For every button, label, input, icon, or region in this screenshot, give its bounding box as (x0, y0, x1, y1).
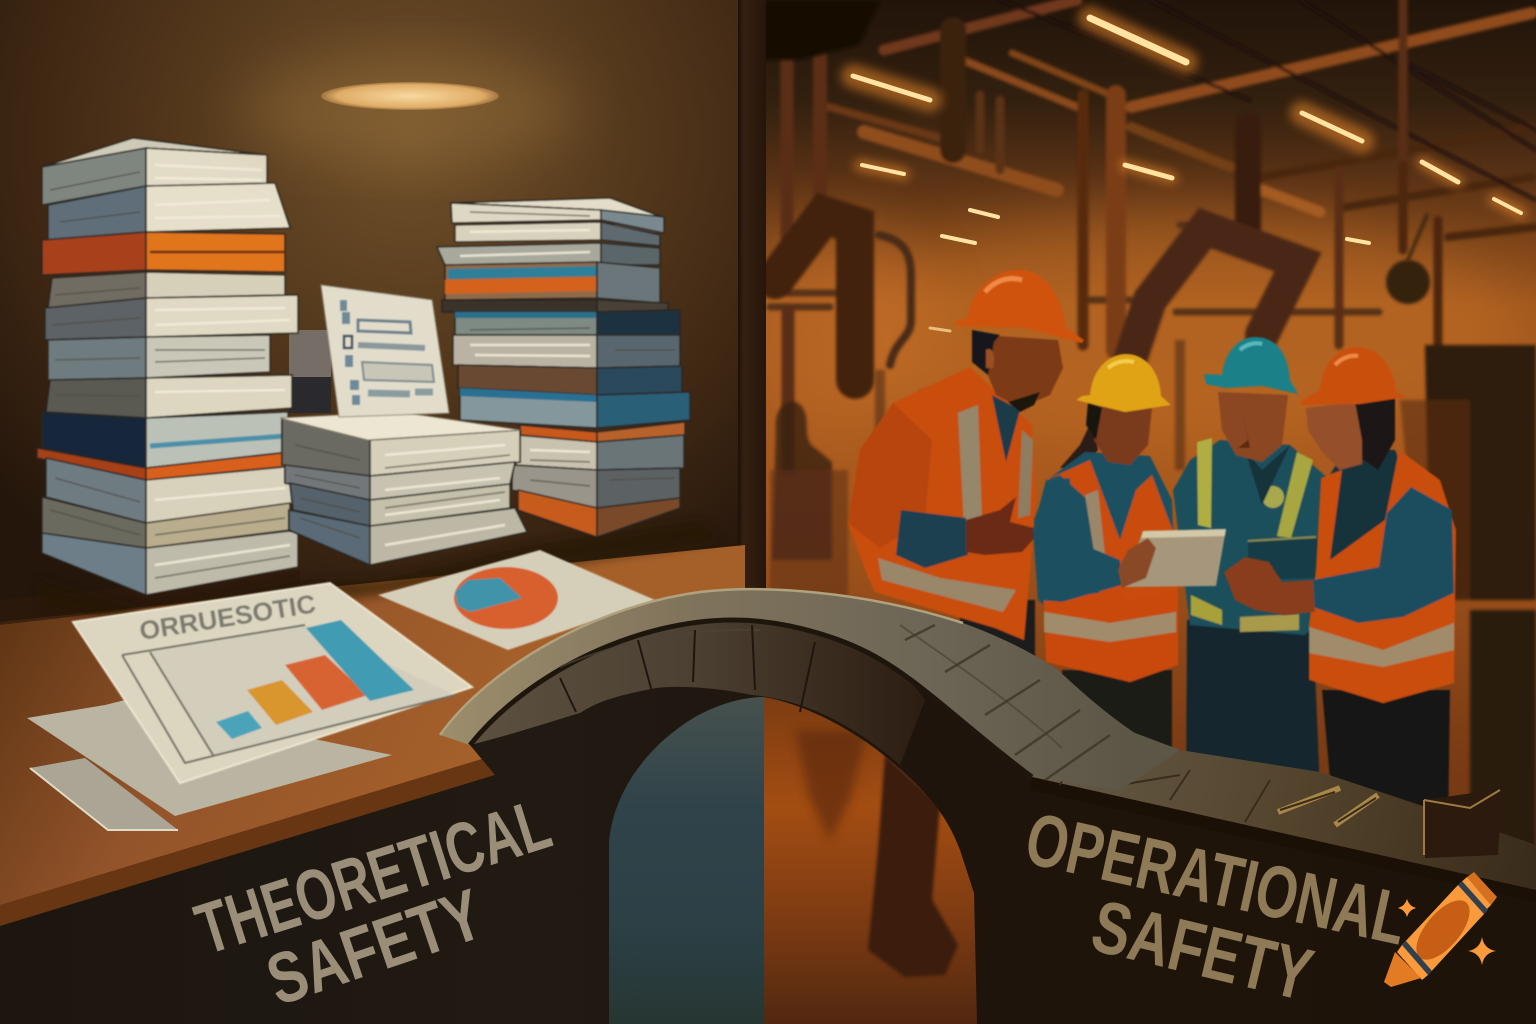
panel: factory background (766, 0, 1536, 890)
machinery pipes (775, 215, 855, 380)
label: theoretical safety (187, 784, 560, 1021)
panel: right book stack (437, 198, 690, 537)
icon: upright form document (321, 285, 449, 417)
sparkles (1398, 899, 1496, 965)
label: theoretical safety: SAFETY (257, 874, 492, 1021)
chart heading: ORRUESOTIC (137, 588, 318, 646)
lower wall with arch cut-out (0, 620, 1536, 1024)
worker 3: teal helmet (1173, 337, 1340, 790)
worker 2: yellow helmet (1033, 354, 1178, 760)
worker 4: orange helmet (1224, 347, 1456, 835)
panel: left book stack (37, 138, 298, 595)
bridge arch (440, 589, 1180, 790)
left wall background (0, 0, 745, 760)
road deck (1030, 733, 1536, 902)
shadow beneath book stacks (40, 520, 720, 625)
label: theoretical safety: THEORETICAL (187, 784, 560, 970)
panel: centre book stack (280, 412, 527, 565)
desk (0, 545, 745, 928)
icon: crayon logo (1384, 872, 1497, 987)
ceiling lamp (240, 55, 580, 165)
divider post between worlds (738, 0, 766, 700)
grey box behind document (289, 330, 331, 413)
voussoir face (470, 620, 925, 765)
tools on road (1278, 788, 1378, 825)
panel: pie chart paper (378, 550, 655, 650)
worker 1: orange helmet (848, 270, 1084, 660)
stone arch top surface (440, 589, 1180, 790)
label: operational safety (1019, 797, 1414, 1017)
ceiling lights (853, 18, 1521, 331)
silhouette legs through arch (868, 755, 958, 977)
tablet (1118, 529, 1226, 588)
loose paper sheets under chart (27, 700, 392, 830)
panel: bar chart paper (73, 583, 472, 783)
toolbox on road (1424, 790, 1502, 858)
arch opening (600, 690, 984, 1024)
